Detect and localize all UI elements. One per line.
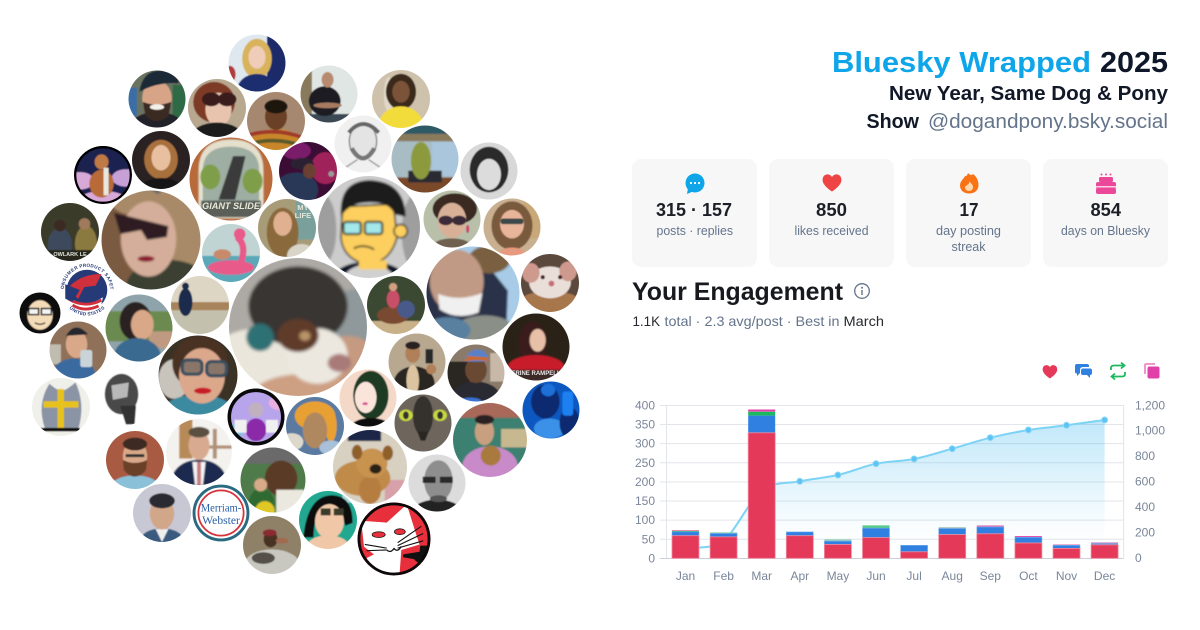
avatar: white cat with pipe logo [347,492,441,586]
avatar: bearded man by brick wall [106,431,164,489]
profile name line 2: Show [866,111,919,133]
legend icon: quotes [1145,364,1160,378]
avatar: charcoal mask drawing [104,373,139,426]
avatar: riding arena [171,276,229,334]
avatar: flame-haired illustration [277,388,353,464]
avatar: cat with green eyes [386,386,460,460]
avatar: pet rat [521,254,579,312]
avatar: woman with curly hair and glasses [102,190,200,290]
avatar: bishop mitre [32,378,90,436]
month labels: May [827,569,849,583]
right axis labels: 200 [1135,526,1155,540]
avatar: purple ringed portrait [228,388,284,446]
engagement summary: total · 2.3 avg/post · Best in [664,313,840,329]
left axis labels: 300 [635,436,655,450]
right axis labels: 1,000 [1135,424,1165,438]
bar: Aug [939,527,966,558]
avatar: man with face mask [426,246,520,340]
bar: Feb [710,532,737,558]
avatar: CPSC seal [60,264,114,316]
avatar: equestrian rider [367,276,425,334]
avatar: child in striped sweater [247,92,305,150]
month labels: Dec [1094,569,1115,583]
chart legend [1043,362,1160,380]
chart: engagement bars and cumulative line [635,398,1165,583]
avatar: man drinking iced beverage [50,322,106,378]
bar: Jun [862,525,890,558]
label: posts · replies [656,223,733,238]
cumulative area [686,420,1105,558]
month labels: Jun [866,569,886,583]
bar: Mar [748,410,775,558]
profile name line 1: New Year, Same Dog & Pony [889,83,1169,105]
avatar: Merriam-Webster logo [183,475,259,551]
right axis labels: 800 [1135,449,1155,463]
avatar: woman with red lipstick and glasses [158,336,238,414]
avatar: man in blue-orange cap [439,336,513,413]
avatar: cartoon man with glasses [318,176,420,278]
grid lines [660,405,1124,558]
month labels: Jul [906,569,922,583]
left axis labels: 0 [648,552,655,566]
month labels: Nov [1056,569,1077,583]
engagement summary: March [844,313,884,329]
avatar: otter illustration [74,146,132,204]
avatar: young woman long hair [258,199,316,257]
avatar: cartoon woman with dark hair [331,361,405,435]
left axis labels [635,398,655,566]
icon: flame [960,173,978,194]
month labels [676,569,1115,583]
right axis labels: 0 [1135,551,1142,565]
left axis labels: 250 [635,456,655,470]
avatar: speaker with microphone [279,142,337,200]
month labels: Oct [1019,569,1038,583]
icon: info [855,284,869,298]
icon: chat bubble [686,174,704,194]
month labels: Mar [751,569,772,583]
heading: Your Engagement: Your Engagement [632,278,844,306]
stat card: posting streak [906,159,1031,267]
bar: Apr [786,532,813,558]
cumulative line [686,420,1105,549]
stat card: days on Bluesky [1043,159,1168,267]
left axis labels: 100 [635,513,655,527]
legend icon: replies [1075,364,1092,378]
right axis labels: 400 [1135,500,1155,514]
avatar: woman with sunglasses [188,79,246,137]
avatar: yellow jacket portrait [372,70,430,128]
avatar: TV still [41,203,99,261]
avatar: blue-toned woman with phone [514,373,588,447]
avatar: smiling man in blazer [124,475,200,553]
engagement summary [632,313,884,329]
avatar: blonde woman [228,34,286,92]
avatar: man reclining in red cap [234,507,310,584]
bar: Dec [1091,542,1118,558]
left axis labels: 50 [642,532,655,546]
avatar: man in navy suit [156,409,242,501]
bar: Oct [1015,536,1042,558]
avatar: Giant Slide patch [190,138,272,220]
stacked bars [672,410,1118,558]
label second line: streak [952,239,986,254]
legend icon: likes heart [1043,365,1057,378]
avatar: halftone hair [460,142,518,200]
bar: Nov [1053,544,1080,558]
label: days on Bluesky [1061,223,1150,238]
right axis labels [1135,398,1165,565]
header: title [832,47,1169,133]
avatar: large dog photo [229,258,367,396]
legend icon: reposts [1111,362,1125,380]
stat card: likes [769,159,894,267]
month labels: Feb [713,569,734,583]
avatar: man taking mirror selfie [380,325,454,400]
label: day posting [936,223,1001,238]
avatar: grayscale man with glasses [400,446,474,523]
avatar: fluffy tan dog [322,419,418,515]
right axis labels: 1,200 [1135,398,1165,412]
avatar: cartoon man in sunglasses [290,482,366,560]
bar: Jan [672,530,699,558]
month labels: Sep [980,569,1001,583]
bar: May [824,539,851,558]
icon: birthday cake [1096,174,1116,194]
left axis labels: 400 [635,398,655,412]
handle: @dogandpony.bsky.social [928,111,1168,133]
value: 854 [1090,200,1121,220]
left axis labels: 200 [635,475,655,489]
month labels: Jan [676,569,695,583]
title: year: 2025 [1100,47,1168,79]
avatar: chrysalis [392,126,458,192]
icon: heart [823,174,841,192]
month labels: Apr [790,569,809,583]
bar: Sep [977,525,1004,558]
right axis labels: 600 [1135,474,1155,488]
avatar: man in black t-shirt [300,66,358,122]
value: 850 [816,200,847,220]
value: 17 [960,200,978,220]
left axis labels: 350 [635,418,655,432]
avatar: bison mascot [231,438,315,522]
month labels: Aug [942,569,963,583]
stat card: posts and replies [632,159,757,267]
panel: avatar cluster [20,34,580,576]
avatar: woman with long brown hair [484,198,540,256]
avatar: man with coconut drink [442,392,538,488]
avatar: flamingo pool float [202,224,260,282]
engagement summary: 1.1K [632,313,661,329]
avatar: woman in denim jacket [106,294,172,362]
value: 315 · 157 [656,200,732,220]
line points [797,417,1108,484]
avatar: pencil sketch [334,116,392,172]
avatar: woman with wavy auburn hair [132,131,190,189]
title: Bluesky Wrapped: Bluesky Wrapped [832,47,1091,79]
avatar: Catherine Rampell TV still [492,303,580,391]
avatar: woman lowering sunglasses [424,190,480,248]
left axis labels: 150 [635,494,655,508]
label: likes received [794,223,868,238]
avatar: man in cap [128,70,186,128]
avatar: small cartoon face [20,292,60,334]
bar: Jul [901,545,928,558]
